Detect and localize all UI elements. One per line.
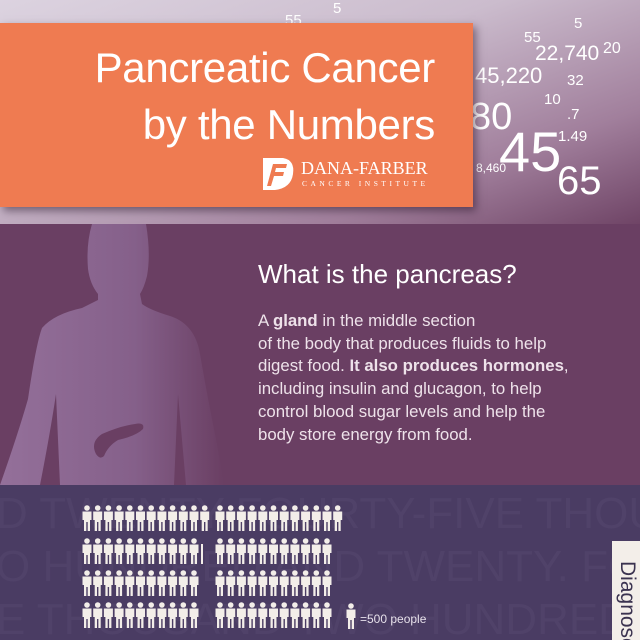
scattered numbers: 20 [603,40,621,57]
pancreas [94,424,143,458]
title [95,44,435,148]
panel: what is the pancreas [0,224,640,485]
body text [258,311,569,444]
scattered numbers: 80 [470,96,512,138]
scattered numbers: 45,220 [475,63,542,88]
scattered numbers: 45 [499,120,561,183]
scattered numbers: 22,740 [535,42,599,65]
scattered numbers: 5 [333,0,341,17]
scattered numbers: 5 [574,15,582,32]
logo: DANA-FARBER [301,158,428,178]
scattered numbers: 55 [285,12,302,29]
title banner [0,23,473,207]
legend [346,603,426,629]
panel: diagnosed [0,485,640,640]
body text: control blood sugar levels and help the [258,402,545,421]
scattered numbers [285,0,621,203]
top header background [0,0,640,224]
body text: A gland in the middle section [258,311,475,330]
body silhouette icon [0,224,205,485]
scattered numbers: 65 [557,159,602,203]
right group [216,505,224,531]
body text: body store energy from food. [258,425,473,444]
body text: of the body that produces fluids to help [258,334,546,353]
title: Pancreatic Cancer [95,44,435,91]
logo [263,158,429,190]
title: by the Numbers [143,101,435,148]
scattered numbers: .7 [567,106,580,123]
background words [0,487,640,640]
scattered numbers: 32 [567,72,584,89]
body text: including insulin and glucagon, to help [258,379,542,398]
scattered numbers: 10 [544,91,561,108]
legend: =500 people [360,612,426,626]
tab: diagnosed [612,541,640,640]
body text: digest food. It also produces hormones, [258,356,569,375]
left group [82,505,92,531]
logo: CANCER INSTITUTE [302,179,429,188]
people chart [82,505,342,628]
heading: What is the pancreas? [258,259,517,289]
scattered numbers: 8,460 [476,161,506,175]
scattered numbers: 1.49 [558,128,587,145]
scattered numbers: 55 [524,29,541,46]
